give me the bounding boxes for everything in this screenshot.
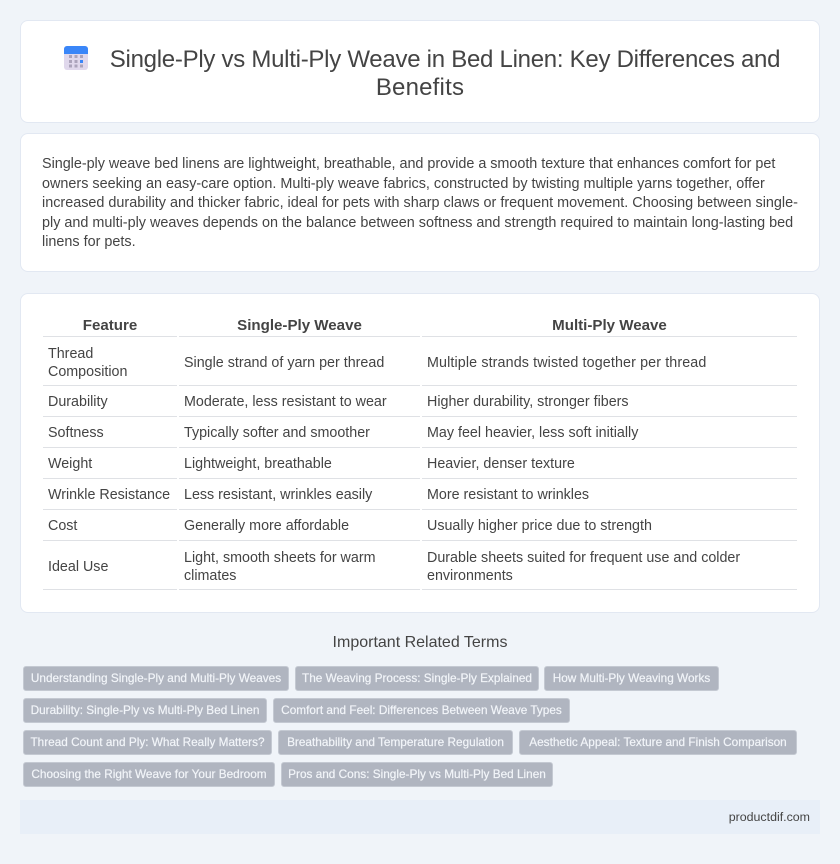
row: cost: Generally more affordable (184, 518, 349, 534)
row: wrinkle resistance: Wrinkle Resistance (48, 487, 170, 503)
tag (23, 666, 289, 691)
tag: How Multi-Ply Weaving Works (553, 671, 710, 685)
row: thread composition (48, 346, 706, 380)
row: ideal use (48, 550, 740, 584)
row: wrinkle resistance (48, 487, 589, 503)
tag: The Weaving Process: Single-Ply Explained (302, 671, 532, 685)
tag: Durability: Single-Ply vs Multi-Ply Bed Linen (31, 703, 259, 717)
row: durability: Higher durability, stronger fibers (427, 394, 629, 410)
tag (23, 730, 272, 755)
row: durability (48, 394, 629, 410)
tag: Understanding Single-Ply and Multi-Ply Weaves (31, 671, 281, 685)
tag (23, 698, 267, 723)
row: ideal use: climates (184, 568, 236, 584)
row: ideal use: environments (427, 568, 513, 584)
row: thread composition: Thread (48, 346, 93, 362)
intro text (42, 156, 798, 250)
panel: header (20, 20, 820, 123)
row: weight: Weight (48, 456, 92, 472)
row: thread composition: Single strand of yarn per thread (184, 355, 384, 371)
row: cost (48, 518, 652, 534)
row: durability: Moderate, less resistant to wear (184, 394, 387, 410)
row: ideal use: Ideal Use (48, 559, 108, 575)
title: Benefits (376, 74, 464, 101)
tag (278, 730, 513, 755)
table header: Multi-Ply Weave (552, 317, 667, 334)
tag: Choosing the Right Weave for Your Bedroom (31, 767, 267, 781)
panel: intro paragraph (20, 133, 820, 272)
tag: Pros and Cons: Single-Ply vs Multi-Ply Bed Linen (288, 767, 546, 781)
title (110, 46, 780, 101)
footer (20, 800, 820, 834)
row: softness: Typically softer and smoother (184, 425, 370, 441)
row: weight: Lightweight, breathable (184, 456, 332, 472)
row: cost: Cost (48, 518, 77, 534)
row: weight: Heavier, denser texture (427, 456, 575, 472)
table header: Single-Ply Weave (237, 317, 362, 334)
table header (83, 317, 667, 334)
row: softness (48, 425, 638, 441)
row: softness: May feel heavier, less soft initially (427, 425, 638, 441)
tag: Comfort and Feel: Differences Between Weave Types (281, 703, 562, 717)
intro text: linens for pets. (42, 234, 136, 250)
title: Single-Ply vs Multi-Ply Weave in Bed Linen: Key Differences and (110, 46, 780, 73)
related terms heading: Important Related Terms (333, 634, 507, 651)
tag: Thread Count and Ply: What Really Matters? (30, 735, 265, 749)
tag (544, 666, 719, 691)
row: cost: Usually higher price due to strength (427, 518, 652, 534)
tag (23, 762, 275, 787)
tag (519, 730, 797, 755)
footer source text: productdif.com (729, 810, 810, 824)
row: softness: Softness (48, 425, 104, 441)
intro text: increased durability and thicker fabric, ideal for pets with sharp claws or frequent movement. Choosing between single- (42, 195, 798, 211)
row: wrinkle resistance: More resistant to wrinkles (427, 487, 589, 503)
row: thread composition: Multiple strands twisted together per thread (427, 355, 706, 371)
intro text: owners seeking an easy-care option. Multi-ply weave fabrics, constructed by twisting multiple yarns together, offer (42, 176, 765, 192)
row: durability: Durability (48, 394, 108, 410)
intro text: Single-ply weave bed linens are lightweight, breathable, and provide a smooth texture that enhances comfort for pet (42, 156, 775, 172)
related terms tags (23, 666, 797, 787)
tag (281, 762, 553, 787)
row: ideal use: Durable sheets suited for frequent use and colder (427, 550, 740, 566)
tag: Breathability and Temperature Regulation (287, 735, 504, 749)
row: thread composition: Composition (48, 364, 127, 380)
row: ideal use: Light, smooth sheets for warm (184, 550, 376, 566)
intro text: ply and multi-ply weaves depends on the balance between softness and strength required to maintain long-lasting bed (42, 214, 793, 230)
comparison table (43, 317, 797, 590)
table header: Feature (83, 317, 137, 334)
icon: calendar (64, 46, 88, 70)
tag: Aesthetic Appeal: Texture and Finish Comparison (529, 735, 787, 749)
tag (295, 666, 539, 691)
row: weight (48, 456, 575, 472)
row: wrinkle resistance: Less resistant, wrinkles easily (184, 487, 372, 503)
tag (273, 698, 570, 723)
panel: comparison table (20, 293, 820, 613)
